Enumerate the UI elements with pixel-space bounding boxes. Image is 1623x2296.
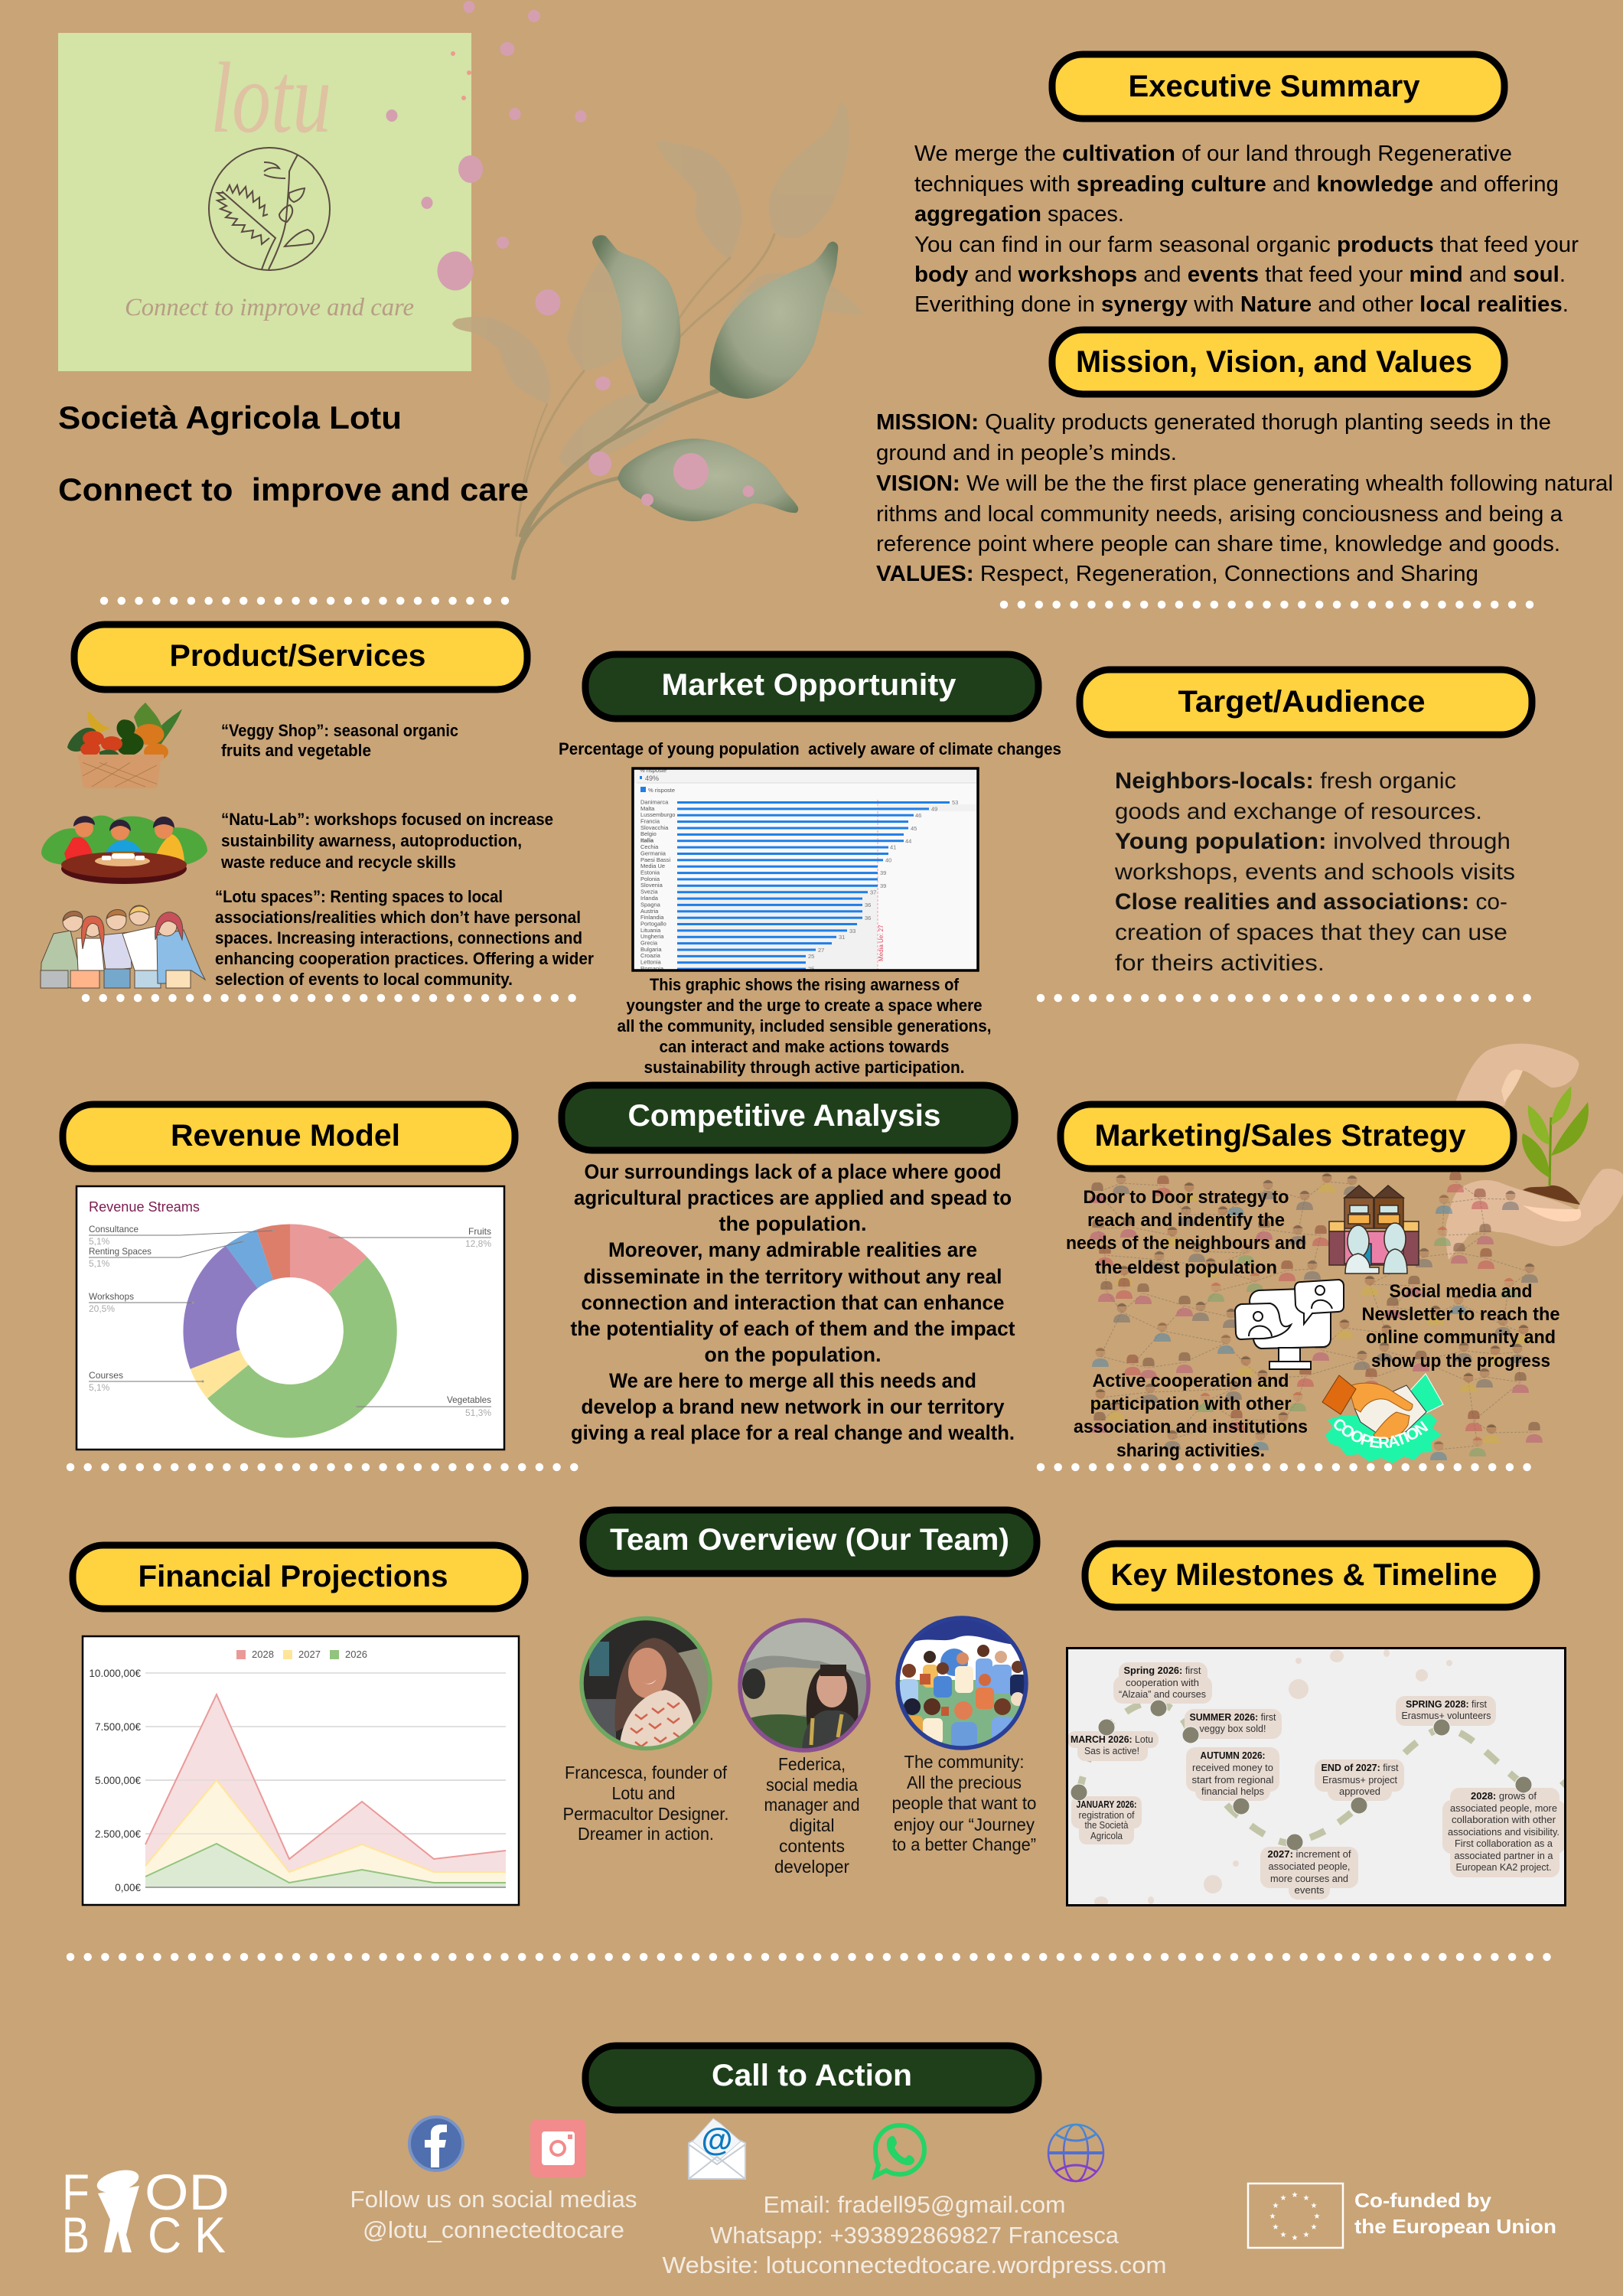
area chart: financial projections: 0,00€ (115, 1882, 141, 1893)
text block: competitive analysis: connection and interaction that can enhance (582, 1291, 1004, 1314)
text block: competitive analysis: agricultural practices are applied and spead to (574, 1186, 1012, 1209)
bar chart: climate awareness: Cechia (640, 843, 659, 850)
text: contact details: Website: lotuconnectedtocare.wordpress.com (663, 2252, 1166, 2278)
text: social media and newsletter: show up the progress (1371, 1351, 1550, 1371)
text block: audience (1114, 768, 1515, 976)
text: veggy shop: “Veggy Shop”: seasonal organic (221, 721, 458, 740)
milestone: Autumn 2026 (1192, 1750, 1274, 1797)
milestone: January 2026: JANUARY 2026: (1076, 1799, 1137, 1810)
milestone: 2027 (1267, 1848, 1351, 1896)
text block: mission, vision, values: MISSION: Quality products generated thorugh planting seeds in the (876, 410, 1551, 435)
logo: co-funded by the European Union: ★ (1292, 2191, 1299, 2200)
bar chart: climate awareness: % risposte (648, 787, 675, 794)
bar chart: climate awareness: 37 (870, 889, 876, 895)
text block: audience: Neighbors-locals: fresh organic (1115, 768, 1456, 794)
caption: community (892, 1752, 1036, 1854)
milestone: 2028: associations and visibility. (1448, 1826, 1559, 1838)
logo wordmark: lotu (210, 41, 331, 154)
logo: Food Back: B (62, 2206, 90, 2263)
text: social media handle (350, 2186, 637, 2243)
bar chart: climate awareness: 25 (808, 966, 814, 972)
logo: co-funded by the European Union (1248, 2183, 1556, 2248)
area chart: financial projections: 2028 (252, 1649, 274, 1660)
milestone: January 2026: the Società (1085, 1819, 1129, 1831)
bar chart: climate awareness: Irlanda (640, 895, 659, 902)
heading: Key Milestones and Timeline (1085, 1544, 1537, 1607)
heading: Revenue Model (63, 1104, 515, 1169)
bar chart: climate awareness: Germania (640, 850, 666, 857)
logo: co-funded by the European Union: ★ (1314, 2213, 1321, 2221)
bar chart: climate awareness: Estonia (640, 869, 660, 876)
text block: mission, vision, values: rithms and local community needs, arising conciousness and being a (876, 502, 1563, 527)
text block: audience: workshops, events and schools visits (1114, 859, 1515, 885)
icon: email envelope (689, 2118, 745, 2179)
caption: community: All the precious (907, 1773, 1022, 1792)
text: natu-lab: sustainbility awarness, autoproduction, (221, 831, 522, 850)
text: active cooperation: sharing activities. (1116, 1440, 1265, 1461)
milestone: Autumn 2026: AUTUMN 2026: (1200, 1750, 1266, 1761)
icon: people at a table (41, 816, 207, 884)
heading: Call to Action: Call to Action (712, 2059, 912, 2092)
heading: Market Opportunity (585, 654, 1038, 719)
bar chart: climate awareness: Danimarca (640, 799, 669, 805)
caption: Francesca: Francesca, founder of (565, 1763, 728, 1782)
bar chart: climate awareness: Lettonia (640, 958, 662, 966)
milestone: 2028: European KA2 project. (1455, 1861, 1552, 1873)
text block: audience: creation of spaces that they can use (1115, 920, 1507, 945)
panel: financial projections (73, 1545, 525, 1905)
text block: audience: for theirs activities. (1115, 951, 1325, 976)
milestone: End of 2027 (1321, 1762, 1399, 1797)
heading: Financial Projections (73, 1545, 525, 1609)
area chart: financial projections: 2.500,00€ (95, 1828, 141, 1840)
bar chart: climate awareness: Media Ue (640, 863, 665, 869)
panel: target audience (1080, 670, 1532, 976)
milestone: 2028 (1448, 1790, 1559, 1873)
text: door to door strategy: needs of the neighbours and (1066, 1233, 1306, 1254)
logo panel (58, 33, 471, 371)
illustration: community (896, 1617, 1028, 1750)
milestone: Autumn 2026: start from regional (1192, 1774, 1274, 1786)
caption: Federica: digital (790, 1815, 834, 1835)
text block: audience: Young population: involved through (1115, 829, 1511, 854)
heading: Team Overview (583, 1510, 1037, 1574)
portrait: Federica (738, 1619, 870, 1753)
caption: community: The community: (904, 1752, 1024, 1772)
milestone: End of 2027: END of 2027: first (1321, 1762, 1399, 1773)
bar chart: climate awareness: Svezia (640, 888, 658, 895)
icon: group of friends (41, 905, 205, 988)
area chart: financial projections: 5.000,00€ (95, 1775, 141, 1786)
text block: mission, vision, values: VALUES: Respect, Regeneration, Connections and Sharing (876, 562, 1478, 586)
area chart: financial projections (83, 1636, 519, 1905)
chart caption: can interact and make actions towards (660, 1037, 949, 1056)
heading: Competitive Analysis (562, 1085, 1015, 1150)
heading: Mission, Vision, and Values (1052, 330, 1504, 394)
bar chart: climate awareness: Paesi Bassi (640, 856, 671, 863)
milestone: Summer 2026 (1189, 1711, 1276, 1734)
caption: Federica: social media (766, 1775, 858, 1795)
caption: community: to a better Change” (892, 1835, 1036, 1854)
text: contact details: Email: fradell95@gmail.com (764, 2191, 1065, 2218)
portrait: Francesca (580, 1617, 712, 1753)
caption: Federica: manager and (764, 1795, 860, 1815)
heading: Financial Projections: Financial Projections (138, 1560, 448, 1593)
illustration: people network (1089, 1172, 1543, 1460)
bar chart: climate awareness: Ungheria (640, 933, 664, 940)
text: social media and newsletter: Social media and (1390, 1281, 1532, 1302)
milestone: Spring 2026: Spring 2026: first (1123, 1665, 1201, 1676)
caption: community: people that want to (892, 1793, 1036, 1813)
bar chart: climate awareness: Spagna (640, 902, 661, 908)
bar chart: climate awareness: 44 (905, 837, 911, 845)
heading: Key Milestones and Timeline: Key Milestones & Timeline (1111, 1558, 1497, 1592)
text block: executive summary: Everithing done in synergy with Nature and other local realities. (914, 292, 1569, 317)
heading: Market Opportunity: Market Opportunity (661, 668, 957, 702)
heading: Executive Summary: Executive Summary (1128, 70, 1420, 103)
heading: Revenue Model: Revenue Model (171, 1119, 400, 1153)
text: lotu spaces: “Lotu spaces”: Renting spaces to local (215, 887, 503, 906)
dotted divider row 2 (86, 994, 1530, 1002)
milestone: End of 2027: approved (1339, 1786, 1380, 1797)
heading: Product/Services: Product/Services (170, 639, 425, 673)
milestone: March 2026: Sas is active! (1084, 1745, 1139, 1756)
logo: co-funded by the European Union: ★ (1311, 2202, 1318, 2210)
area chart: financial projections: 10.000,00€ (89, 1668, 141, 1679)
heading: Call to Action (585, 2046, 1038, 2110)
chart caption: all the community, included sensible generations, (617, 1016, 992, 1035)
panel: call to action (350, 2046, 1166, 2278)
caption: community: enjoy our “Journey (894, 1815, 1035, 1835)
title: company name: Società Agricola Lotu (58, 400, 402, 435)
milestone: 2028: 2028: grows of (1471, 1790, 1537, 1802)
donut chart: revenue streams: Renting Spaces (89, 1246, 152, 1257)
milestone: March 2026 (1071, 1733, 1153, 1756)
text block: executive summary: techniques with spreading culture and knowledge and offering (914, 172, 1559, 197)
bar chart: climate awareness: 41 (890, 843, 896, 851)
heading: Product/Services (74, 625, 527, 690)
caption: Francesca (563, 1763, 728, 1844)
heading: Executive Summary (1052, 54, 1504, 119)
illustration: leaves and pink dots (386, 1, 863, 578)
text: door to door strategy: reach and indentify the (1087, 1210, 1285, 1231)
text: door to door strategy (1066, 1187, 1306, 1278)
text block: executive summary (914, 142, 1579, 317)
text: lotu spaces: spaces. Increasing interactions, connections and (215, 928, 582, 947)
text: lotu spaces: associations/realities which don’t have personal (215, 908, 581, 927)
bar chart: climate awareness: 36 (865, 902, 871, 908)
logo: Food Back (62, 2164, 230, 2263)
bar chart: climate awareness: Media Ue: 27 (878, 925, 885, 961)
text: social media and newsletter: Newsletter to reach the (1362, 1304, 1559, 1325)
text block: executive summary: We merge the cultivation of our land through Regenerative (914, 142, 1512, 166)
milestone: 2028: associated people, more (1450, 1802, 1557, 1814)
milestone: Spring 2028 (1402, 1698, 1491, 1721)
milestone: Spring 2026 (1119, 1665, 1206, 1700)
panel: revenue model (63, 1104, 515, 1450)
heading: Mission, Vision, and Values: Mission, Vision, and Values (1076, 345, 1472, 379)
logo tagline: Connect to improve and care (125, 294, 414, 321)
text: door to door strategy: the eldest population (1095, 1257, 1277, 1278)
text block: competitive analysis: Moreover, many admirable realities are (608, 1238, 977, 1261)
chart caption (617, 975, 992, 1077)
milestone: Spring 2028: SPRING 2028: first (1406, 1698, 1487, 1710)
panel: team overview (563, 1510, 1037, 1877)
text: natu-lab: waste reduce and recycle skills (220, 853, 456, 872)
bar chart: climate awareness: % risposte (640, 767, 666, 774)
bar chart: climate awareness: Grecia (640, 940, 658, 946)
bar chart: climate awareness: Lituania (640, 927, 661, 934)
illustration: hands holding a plant (1445, 1044, 1623, 1260)
text: lotu spaces: enhancing cooperation practices. Offering a wider (215, 949, 594, 968)
caption: Federica: contents (779, 1836, 845, 1856)
logo: co-funded by the European Union: ★ (1280, 2231, 1287, 2239)
milestone: Autumn 2026: financial helps (1201, 1786, 1264, 1797)
donut chart: revenue streams: 20,5% (89, 1303, 115, 1314)
milestone: January 2026: Agricola (1090, 1830, 1123, 1841)
bar chart: climate awareness: Belgio (640, 830, 657, 837)
milestone: 2028: collaboration with other (1452, 1814, 1556, 1825)
heading: Target/Audience (1080, 670, 1532, 735)
milestone: 2027: associated people, (1269, 1861, 1350, 1872)
text: contact details (663, 2191, 1166, 2278)
text block: competitive analysis: We are here to merge all this needs and (609, 1369, 976, 1392)
bar chart: climate awareness: Slovacchia (640, 824, 669, 831)
logo: Food Back: OD (145, 2164, 230, 2220)
text: lotu spaces (215, 887, 594, 989)
logo: co-funded by the European Union: Co-funded by (1354, 2189, 1492, 2212)
icon: houses and neighbours (1329, 1186, 1419, 1274)
donut chart: revenue streams: Vegetables (447, 1394, 491, 1405)
bar chart: climate awareness: Slovenia (640, 882, 663, 889)
logo: co-funded by the European Union: ★ (1269, 2213, 1276, 2221)
text: active cooperation (1074, 1371, 1308, 1461)
panel: product services (41, 625, 594, 989)
panel: key milestones and timeline (1067, 1544, 1569, 1907)
text: social media handle: Follow us on social medias (350, 2186, 637, 2213)
text: active cooperation: Active cooperation and (1093, 1371, 1289, 1391)
bar chart: climate awareness: 36 (865, 915, 871, 921)
milestone: Spring 2028: Erasmus+ volunteers (1402, 1710, 1491, 1721)
bar chart: climate awareness: Finlandia (640, 914, 664, 921)
bar chart: climate awareness: 27 (818, 947, 824, 954)
bar chart: climate awareness: 33 (849, 928, 855, 934)
text block: competitive analysis: the population. (719, 1212, 866, 1235)
donut chart: revenue streams (77, 1186, 504, 1450)
panel: market opportunity (559, 654, 1061, 1077)
text: veggy shop (221, 721, 458, 760)
chart title: Percentage of young population actively aware of climate changes (559, 739, 1061, 758)
heading: Competitive Analysis: Competitive Analysis (627, 1099, 941, 1133)
heading: Marketing/Sales Strategy: Marketing/Sales Strategy (1094, 1119, 1466, 1153)
text: door to door strategy: Door to Door strategy to (1084, 1187, 1289, 1208)
bar chart: climate awareness: Francia (640, 817, 660, 825)
text block: mission, vision, values: VISION: We will be the the first place generating whealth following natural (876, 471, 1613, 496)
bar chart: climate awareness: Malta (640, 805, 655, 812)
area chart: financial projections: 2026 (345, 1649, 367, 1660)
area chart: financial projections: 7.500,00€ (95, 1721, 141, 1733)
milestone: Summer 2026: SUMMER 2026: first (1189, 1711, 1276, 1723)
icon: facebook (409, 2117, 463, 2170)
milestone: Autumn 2026: received money to (1192, 1762, 1273, 1773)
chart caption: youngster and the urge to create a space where (626, 996, 983, 1015)
bar chart: climate awareness: 49% (645, 775, 659, 782)
bar chart: climate awareness: Polonia (640, 876, 660, 882)
logo: co-funded by the European Union: ★ (1273, 2223, 1279, 2232)
caption: Francesca: Permacultor Designer. (563, 1804, 728, 1824)
logo: co-funded by the European Union: ★ (1280, 2194, 1287, 2203)
icon: cooperation handshake badge: COOPERATION (1334, 1419, 1428, 1448)
donut chart: revenue streams: 12,8% (465, 1238, 491, 1249)
donut chart: revenue streams: Revenue Streams (89, 1199, 200, 1215)
heading: Team Overview: Team Overview (Our Team) (610, 1523, 1009, 1557)
milestone: 2027: events (1295, 1884, 1325, 1896)
milestone: January 2026: registration of (1079, 1809, 1135, 1821)
area chart: financial projections: 2027 (298, 1649, 321, 1660)
text block: mission, vision, values: ground and in people’s minds. (876, 441, 1177, 465)
milestone: 2028: First collaboration as a (1455, 1838, 1553, 1849)
text: active cooperation: association and institutions (1074, 1417, 1308, 1437)
panel: competitive analysis (562, 1085, 1015, 1444)
logo: co-funded by the European Union: ★ (1303, 2231, 1310, 2239)
milestone: March 2026: MARCH 2026: Lotu (1071, 1733, 1153, 1745)
text: social media handle: @lotu_connectedtocare (363, 2216, 624, 2243)
bar chart: climate awareness: Bulgaria (640, 946, 662, 953)
icon: whatsapp (875, 2125, 924, 2176)
caption: Federica (764, 1754, 860, 1877)
logo: co-funded by the European Union: ★ (1311, 2223, 1318, 2232)
text: social media and newsletter: online community and (1366, 1327, 1556, 1348)
logo: co-funded by the European Union: the European Union (1354, 2215, 1556, 2238)
chart caption: sustainability through active participation. (644, 1058, 964, 1077)
bar chart: climate awareness: Croazia (640, 952, 661, 959)
icon: monitor with chat bubbles (1235, 1280, 1344, 1369)
milestone: 2028: associated partner in a (1454, 1850, 1553, 1861)
text block: competitive analysis: giving a real place for a real change and wealth. (571, 1421, 1015, 1444)
text block: competitive analysis: disseminate in the territory without any real (583, 1265, 1002, 1288)
logo emblem (209, 148, 330, 270)
bar chart: climate awareness: 31 (839, 934, 845, 941)
donut chart: revenue streams: 5,1% (89, 1236, 110, 1247)
title: tagline: Connect to improve and care (58, 471, 529, 507)
dotted divider row 3 (70, 1463, 1530, 1471)
bar chart: climate awareness: 25 (808, 953, 814, 960)
bar chart: climate awareness: 53 (952, 799, 958, 806)
bar chart: climate awareness: Lussemburgo (640, 811, 675, 818)
logo: Food Back: F (62, 2164, 90, 2220)
bar chart: climate awareness: Austria (640, 908, 659, 915)
heading: Target/Audience: Target/Audience (1178, 685, 1425, 719)
donut chart: revenue streams: 51,3% (465, 1407, 491, 1418)
bar chart: climate awareness: 45 (911, 825, 917, 832)
text block: competitive analysis: on the population. (704, 1343, 882, 1366)
caption: Federica: developer (774, 1857, 849, 1877)
caption: Francesca: Lotu and (612, 1783, 675, 1803)
text block: executive summary: aggregation spaces. (914, 202, 1124, 227)
milestone: Spring 2026: cooperation with (1126, 1677, 1199, 1688)
milestone: End of 2027: Erasmus+ project (1322, 1774, 1397, 1786)
donut chart: revenue streams: 5,1% (89, 1382, 110, 1393)
icon: cooperation handshake badge (1322, 1373, 1444, 1463)
text block: competitive analysis (571, 1160, 1015, 1444)
text block: mission, vision, values: reference point where people can share time, knowledge and goods. (876, 532, 1560, 556)
donut chart: revenue streams: Courses (89, 1370, 123, 1381)
icon: website globe (1048, 2125, 1103, 2181)
text block: competitive analysis: the potentiality of each of them and the impact (571, 1317, 1015, 1340)
panel: marketing and sales strategy (1058, 1044, 1623, 1471)
milestone: January 2026 (1076, 1799, 1137, 1841)
icon: email envelope: @ (702, 2122, 732, 2157)
dotted divider row 4 (70, 1953, 1549, 1961)
text block: competitive analysis: develop a brand new network in our territory (582, 1395, 1004, 1418)
bar chart: climate awareness: 39 (880, 882, 886, 889)
text block: audience: Close realities and associations: co- (1115, 889, 1507, 915)
donut chart: revenue streams: Fruits (468, 1226, 491, 1237)
text: veggy shop: fruits and vegetable (221, 741, 371, 760)
bar chart: climate awareness: 40 (885, 857, 891, 863)
text: active cooperation: participation with other (1090, 1394, 1292, 1414)
bar chart: climate awareness (632, 767, 979, 972)
text: social media and newsletter (1362, 1281, 1559, 1371)
caption: Federica: Federica, (778, 1754, 846, 1774)
bar chart: climate awareness: Romania (640, 965, 664, 972)
logo: co-funded by the European Union: ★ (1292, 2234, 1299, 2242)
chart caption: This graphic shows the rising awarness of (650, 975, 960, 994)
donut chart: revenue streams: Workshops (89, 1291, 134, 1302)
milestone: Summer 2026: veggy box sold! (1200, 1723, 1266, 1734)
heading: Marketing/Sales Strategy (1061, 1104, 1514, 1169)
dotted divider row 1 (104, 601, 1530, 605)
logo: Food Back: C K (148, 2206, 226, 2263)
text block: executive summary: You can find in our farm seasonal organic products that feed your (914, 233, 1579, 257)
bar chart: climate awareness: 46 (915, 812, 921, 819)
text: lotu spaces: selection of events to local community. (215, 970, 513, 989)
caption: Francesca: Dreamer in action. (578, 1824, 714, 1844)
icon: instagram (530, 2119, 586, 2177)
text: contact details: Whatsapp: +393892869827 Francesca (710, 2222, 1119, 2249)
bar chart: climate awareness: 39 (880, 869, 886, 876)
bar chart: climate awareness: Italia (640, 837, 654, 843)
text block: mission, vision, values (876, 410, 1613, 586)
text block: executive summary: body and workshops and events that feed your mind and soul. (914, 263, 1566, 287)
logo: co-funded by the European Union: ★ (1273, 2202, 1279, 2210)
text block: competitive analysis: Our surroundings lack of a place where good (585, 1160, 1001, 1183)
timeline chart (1067, 1648, 1569, 1907)
milestone: Spring 2026: “Alzaia” and courses (1119, 1688, 1206, 1700)
milestone: 2027: 2027: increment of (1267, 1848, 1351, 1860)
bar chart: climate awareness: 49 (931, 805, 937, 813)
text block: audience: goods and exchange of resources. (1115, 799, 1482, 824)
logo: co-funded by the European Union: ★ (1303, 2194, 1310, 2203)
bar chart: climate awareness: Portogallo (640, 920, 666, 928)
milestone: 2027: more courses and (1270, 1873, 1348, 1884)
text: natu-lab (220, 810, 553, 872)
text: natu-lab: “Natu-Lab”: workshops focused on increase (221, 810, 553, 829)
donut chart: revenue streams: Consultance (89, 1224, 139, 1234)
icon: vegetable basket (67, 703, 182, 788)
donut chart: revenue streams: 5,1% (89, 1258, 110, 1269)
